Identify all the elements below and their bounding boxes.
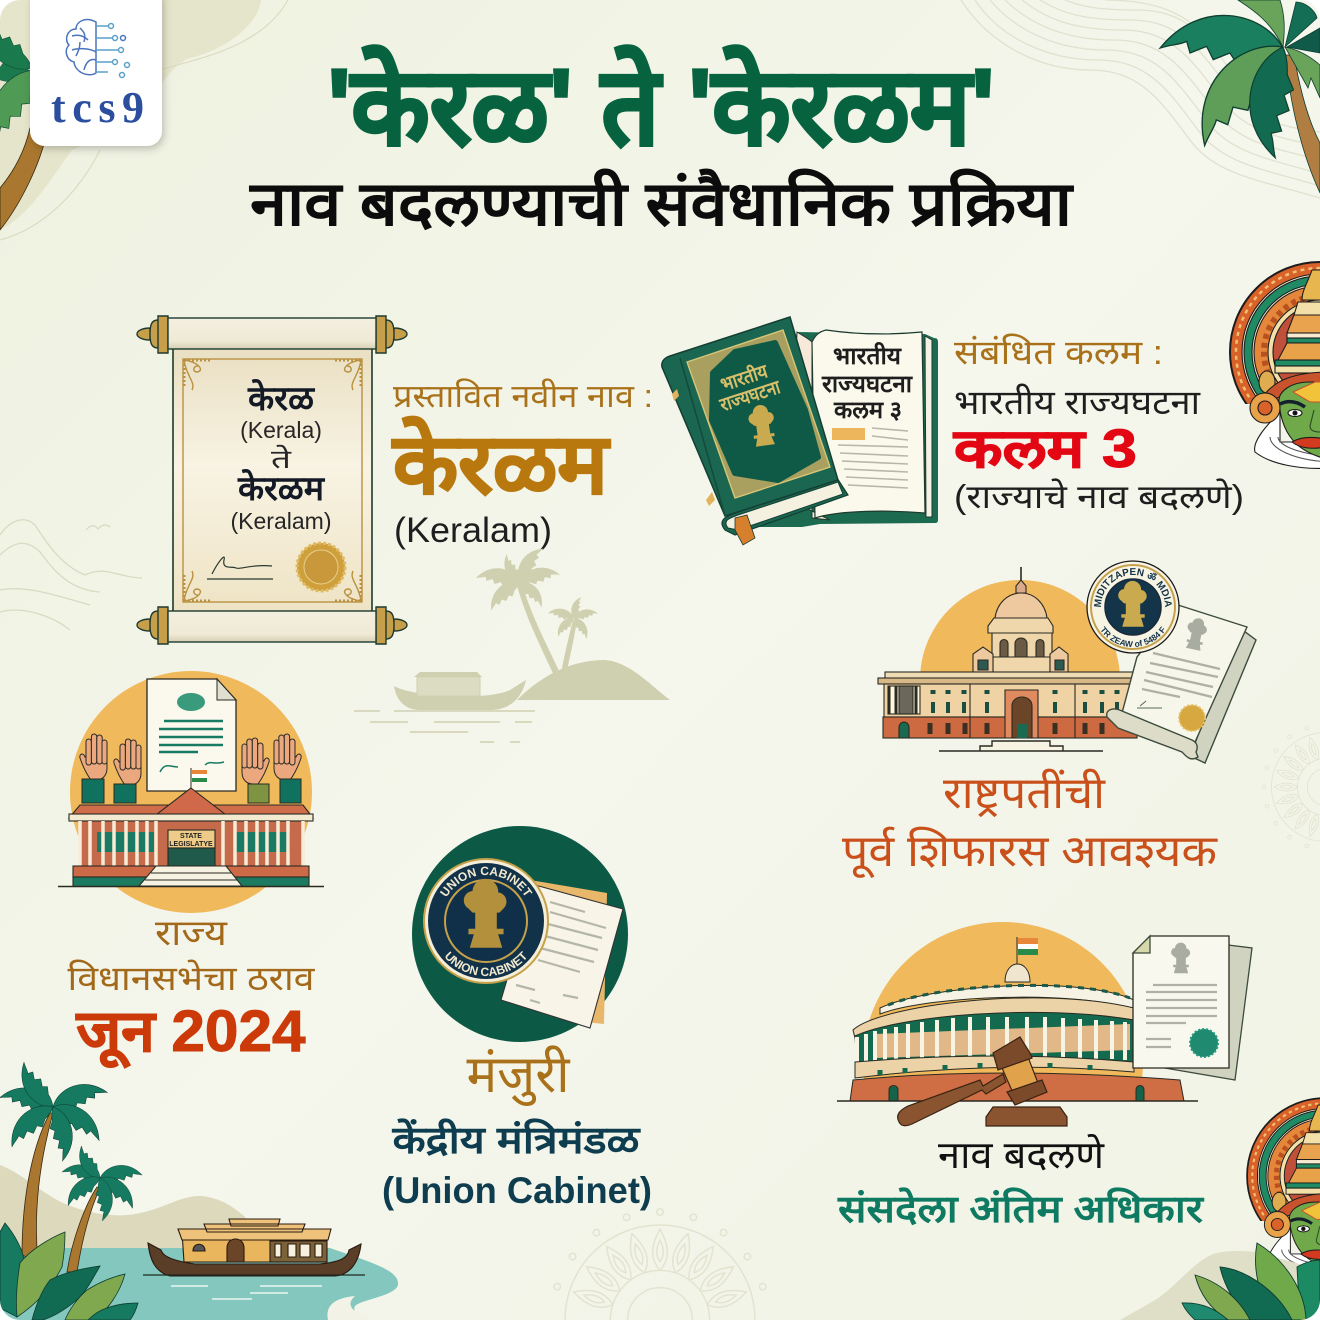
scroll caps xyxy=(137,316,407,644)
cabinet seal: UNION CABINET xyxy=(440,866,532,896)
logo wordmark: tcs9 xyxy=(51,83,144,132)
cover title xyxy=(717,359,784,417)
houseboat xyxy=(148,1219,361,1276)
text: president recommendation: पूर्व शिफारस आवश्यक xyxy=(842,826,1218,879)
watermark island and boat xyxy=(354,542,670,742)
left page xyxy=(790,332,830,520)
text: cabinet approval: मंजुरी xyxy=(466,1045,571,1106)
resolution document xyxy=(147,679,236,791)
scroll text: केरळम xyxy=(237,468,326,508)
seal: TR ZEAW of 5484 F xyxy=(1101,626,1164,647)
ground line xyxy=(939,741,1103,751)
assembly building xyxy=(69,788,313,886)
palm one xyxy=(0,1059,109,1262)
panel: constitution book xyxy=(662,317,938,545)
kathakali mask: bottom right xyxy=(1247,1098,1320,1277)
text: president recommendation xyxy=(842,768,1218,879)
cabinet seal: UNION CABINET xyxy=(446,951,526,976)
seal xyxy=(1086,560,1180,654)
top left palm xyxy=(0,15,47,230)
signature xyxy=(207,557,273,579)
palm two xyxy=(61,1144,142,1272)
background: top left sand blob xyxy=(0,0,288,240)
text: cabinet approval: केंद्रीय मंत्रिमंडळ xyxy=(391,1118,641,1162)
book page text: भारतीय xyxy=(833,342,902,370)
gold seal xyxy=(297,543,345,591)
text: state assembly resolution xyxy=(68,912,316,1069)
logo card xyxy=(30,0,162,146)
right page xyxy=(812,330,925,518)
subtitle: नाव बदलण्याची संवैधानिक प्रक्रिया xyxy=(249,168,1074,239)
dome xyxy=(973,567,1068,672)
hands xyxy=(80,734,301,803)
cover title: भारतीय xyxy=(718,359,771,396)
building body xyxy=(878,672,1137,738)
background: top right wave lines xyxy=(961,0,1320,198)
book page text xyxy=(821,342,913,424)
book page text: राज्यघटना xyxy=(821,371,913,398)
text: related article: (राज्याचे नाव बदलणे) xyxy=(954,478,1244,515)
assembly building: LEGISLATYE xyxy=(169,841,213,848)
assembly building: STATE xyxy=(180,833,202,840)
cover emblem xyxy=(747,403,777,447)
seal: MIDITZAPEN ॐ MDIA xyxy=(1094,568,1172,608)
text: proposed new name xyxy=(391,378,653,550)
ground line xyxy=(837,1100,1198,1102)
kathakali mask: top right xyxy=(1230,262,1320,468)
scroll border ornament xyxy=(183,359,362,602)
text: state assembly resolution: राज्य xyxy=(155,912,228,953)
cabinet seal xyxy=(423,858,549,984)
text: parliament final authority: संसदेला अंतिम अधिकार xyxy=(837,1187,1205,1231)
text: related article: भारतीय राज्यघटना xyxy=(954,383,1201,422)
panel: president building xyxy=(877,560,1257,764)
sun xyxy=(864,922,1143,1078)
text: proposed new name: (Keralam) xyxy=(394,511,552,550)
document xyxy=(1107,605,1256,763)
text: proposed new name: केरळम xyxy=(391,416,611,511)
scroll rollers xyxy=(168,318,376,642)
water xyxy=(0,1248,398,1320)
text: parliament final authority: नाव बदलणे xyxy=(938,1133,1105,1177)
scroll text: (Keralam) xyxy=(231,508,331,534)
text: cabinet approval: (Union Cabinet) xyxy=(382,1170,652,1211)
open book back cover xyxy=(750,332,938,527)
cover title: राज्यघटना xyxy=(717,377,784,417)
book page text: कलम ३ xyxy=(833,397,902,424)
text: president recommendation: राष्ट्रपतींची xyxy=(943,768,1107,818)
text: parliament final authority xyxy=(837,1133,1205,1231)
panel: union cabinet xyxy=(412,826,628,1042)
text: related article: कलम 3 xyxy=(953,419,1137,479)
background: bottom center mandala xyxy=(552,1209,768,1320)
book page lines xyxy=(838,428,908,488)
book cover xyxy=(662,317,848,545)
text: state assembly resolution: विधानसभेचा ठराव xyxy=(68,959,316,998)
scroll paper xyxy=(173,348,372,612)
panel: scroll xyxy=(137,316,407,644)
background: right edge mandala xyxy=(1262,725,1320,849)
sun xyxy=(70,671,312,913)
text: state assembly resolution: जून 2024 xyxy=(75,999,306,1069)
documents xyxy=(530,880,607,1024)
flag and dome xyxy=(1005,937,1038,982)
text: related article xyxy=(953,333,1244,515)
panel: state legislature xyxy=(58,671,324,913)
top right palm xyxy=(1160,0,1320,193)
ground line xyxy=(58,886,324,888)
scroll text: केरळ xyxy=(247,378,315,418)
scroll text: (Kerala) xyxy=(240,417,322,443)
scroll text xyxy=(231,378,331,534)
panel: parliament xyxy=(837,922,1253,1127)
title: 'केरळ' ते 'केरळम' xyxy=(327,45,995,167)
text: related article: संबंधित कलम : xyxy=(954,333,1163,372)
rotunda xyxy=(850,985,1184,1101)
gavel xyxy=(898,1037,1067,1126)
bottom right sand and leaves xyxy=(1120,1243,1320,1320)
bottom left scene xyxy=(0,1059,398,1320)
leaves xyxy=(0,1223,138,1320)
background: left hills line art xyxy=(0,520,142,630)
flag xyxy=(191,768,207,790)
sun xyxy=(920,580,1120,672)
text: proposed new name: प्रस्तावित नवीन नाव : xyxy=(393,378,653,414)
scroll text: ते xyxy=(271,444,293,474)
waterline xyxy=(171,1286,322,1299)
text: cabinet approval xyxy=(382,1045,652,1211)
hill xyxy=(0,1165,262,1250)
decree documents xyxy=(1133,936,1252,1080)
icon: brain circuit xyxy=(66,20,130,78)
